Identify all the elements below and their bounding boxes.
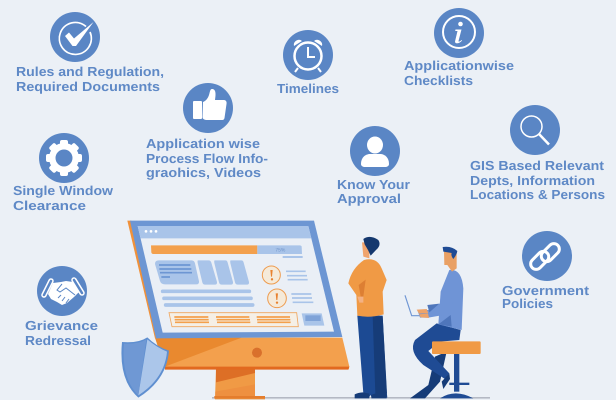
label: checklists: Applicationwise [404,58,514,73]
icon: handshake [37,266,87,316]
action row [169,313,324,327]
laptop [405,295,427,316]
label: single window [13,183,114,213]
feature: timelines [277,30,339,96]
label: grievance redressal: Redressal [25,333,91,348]
label: know your approval: Know Your [337,177,410,192]
label: grievance redressal [25,318,98,348]
label: process flow: Process Flow Info- [146,151,268,166]
label: know your approval: Approval [337,191,401,206]
label: timelines: Timelines [277,81,339,96]
feature: GIS [470,105,605,202]
label: process flow: Application wise [146,136,260,151]
label: rules and regulation: Rules and Regulation, [16,64,164,79]
icon: information [434,8,484,58]
label: government policies: Government [502,283,590,298]
label: single window: Single Window [13,183,114,198]
label: single window: Clearance [13,198,86,213]
torso and arm [438,270,463,330]
illustration: monitor [127,221,349,399]
label: process flow: graohics, Videos [146,165,261,180]
illustration: shield [121,337,169,398]
content cards [155,260,249,285]
feature: rules and regulation [16,12,164,94]
monitor stand [214,368,265,399]
monitor base panel [155,338,349,370]
label: grievance redressal: Grievance [25,318,98,333]
icon: chain link [522,231,572,281]
label: government policies: Policies [502,296,553,311]
legs [410,352,447,398]
label: checklists: Checklists [404,73,473,88]
label: GIS: GIS Based Relevant [470,158,605,173]
label: rules and regulation [16,64,164,94]
icon: thumbs up [183,83,233,133]
label: know your approval [337,177,410,206]
feature: grievance redressal [25,266,98,348]
icon: alarm clock [283,30,333,80]
feature: government policies [502,231,590,311]
label: GIS [470,158,605,202]
progress bar: 75% [275,247,285,253]
standing man [348,237,387,398]
label: government policies [502,283,590,311]
seated man [405,247,481,398]
progress bar [151,245,303,258]
feature: checklists [404,8,514,88]
stool post and base [440,353,473,398]
label: process flow [146,136,268,180]
monitor frame [127,221,158,338]
label: checklists [404,58,514,88]
label: rules and regulation: Required Documents [16,79,160,94]
feature: process flow [146,83,268,180]
feature: know your approval [337,126,410,206]
label: GIS: Locations & Persons [470,187,605,202]
text lines [163,291,253,305]
alert icons [262,266,313,308]
feature: single window [13,133,114,213]
head [444,252,457,272]
icon: gear [39,133,89,183]
label: GIS: Depts, Information [470,173,595,188]
stool seat [432,341,481,354]
icon: check mark [50,12,100,62]
icon: person [350,126,400,176]
icon: magnifying glass [510,105,560,155]
monitor screen [138,226,334,333]
illustration: people [348,237,481,398]
